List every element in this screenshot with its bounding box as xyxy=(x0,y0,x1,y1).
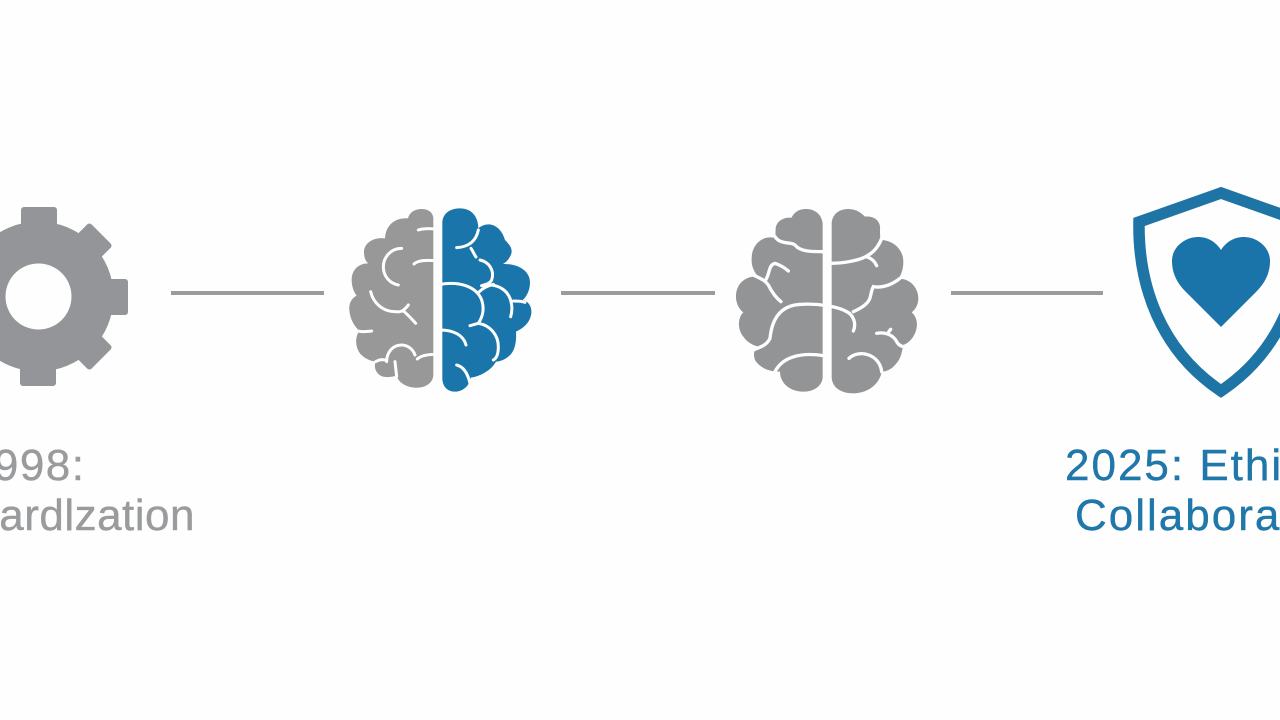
left hemisphere folds xyxy=(353,229,435,377)
label: 1998 standardization xyxy=(0,441,195,540)
right hemisphere folds xyxy=(440,230,525,387)
icon: half grey half blue brain xyxy=(349,208,531,392)
brain folds xyxy=(753,237,904,372)
connector line 2 xyxy=(561,291,715,295)
icon: shield with heart xyxy=(1139,193,1280,391)
shield outline xyxy=(1139,193,1280,391)
connector line 3 xyxy=(951,291,1103,295)
label: 2025 ethics and collaboration xyxy=(1065,441,1280,540)
left grey hemisphere xyxy=(349,209,433,388)
right hemisphere xyxy=(832,209,918,393)
left hemisphere xyxy=(736,209,823,392)
heart xyxy=(1172,237,1270,327)
icon: grey brain xyxy=(736,209,918,393)
right blue hemisphere xyxy=(442,208,531,392)
connector line 1 xyxy=(171,291,324,295)
icon: gear xyxy=(0,207,128,386)
